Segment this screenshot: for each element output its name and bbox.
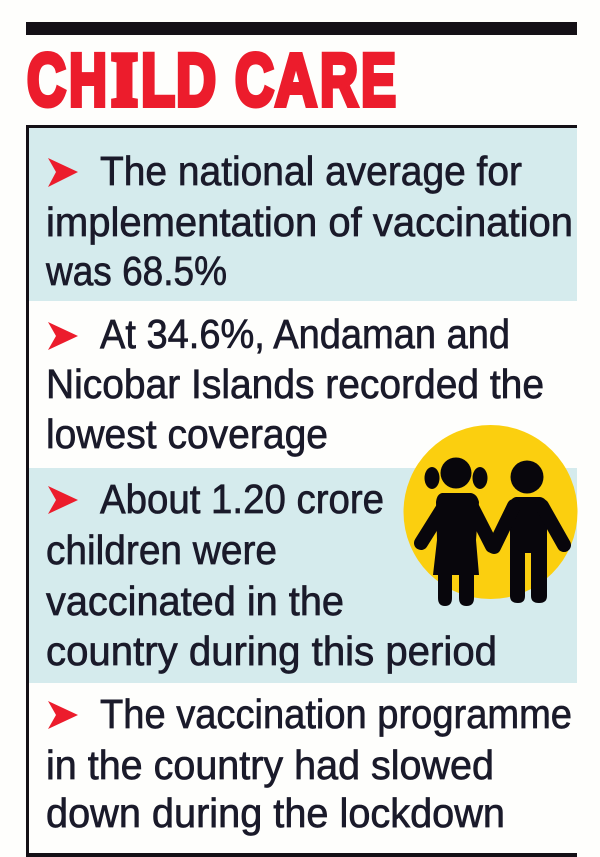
text: children vaccinated: About 1.20 crore [100, 476, 384, 522]
text: lowest coverage: lowest coverage [46, 411, 328, 457]
panel: national average [28, 128, 577, 301]
text: children vaccinated: vaccinated in the [46, 578, 344, 624]
title: R [320, 38, 358, 122]
text: national average: implementation of vaccination [46, 199, 573, 245]
boy figure [494, 460, 564, 603]
bottom rule [26, 853, 577, 857]
arrow bullet 1 [48, 158, 78, 187]
text: lowest coverage: Nicobar Islands recorded the [46, 361, 544, 407]
top black bar [26, 22, 577, 35]
icon: children holding hands on yellow circle [404, 425, 578, 606]
text: programme slowed: The vaccination programme [100, 691, 572, 737]
text: national average: was 68.5% [45, 248, 227, 294]
text: children vaccinated: children were [46, 527, 277, 573]
arrow bullet 3 [48, 486, 78, 514]
text: lowest coverage: At 34.6%, Andaman and [100, 311, 510, 357]
title: E [361, 38, 396, 122]
text: programme slowed: down during the lockdown [46, 790, 505, 836]
title: C [27, 38, 66, 122]
box border [28, 126, 577, 857]
title: I [112, 40, 137, 122]
title: H [69, 38, 107, 122]
title: D [176, 38, 216, 122]
title: A [275, 38, 317, 122]
text: children vaccinated: country during this period [46, 628, 497, 674]
girl figure [421, 458, 492, 606]
title: L [141, 38, 175, 122]
panel: lowest coverage [46, 311, 544, 457]
text: programme slowed: in the country had slowed [46, 742, 494, 788]
panel: programme slowed [46, 691, 572, 836]
panel: children vaccinated [28, 468, 577, 683]
title: C [235, 38, 274, 122]
arrow bullet 4 [48, 701, 78, 729]
arrow bullet 2 [48, 322, 78, 350]
text: national average: The national average for [100, 148, 522, 194]
